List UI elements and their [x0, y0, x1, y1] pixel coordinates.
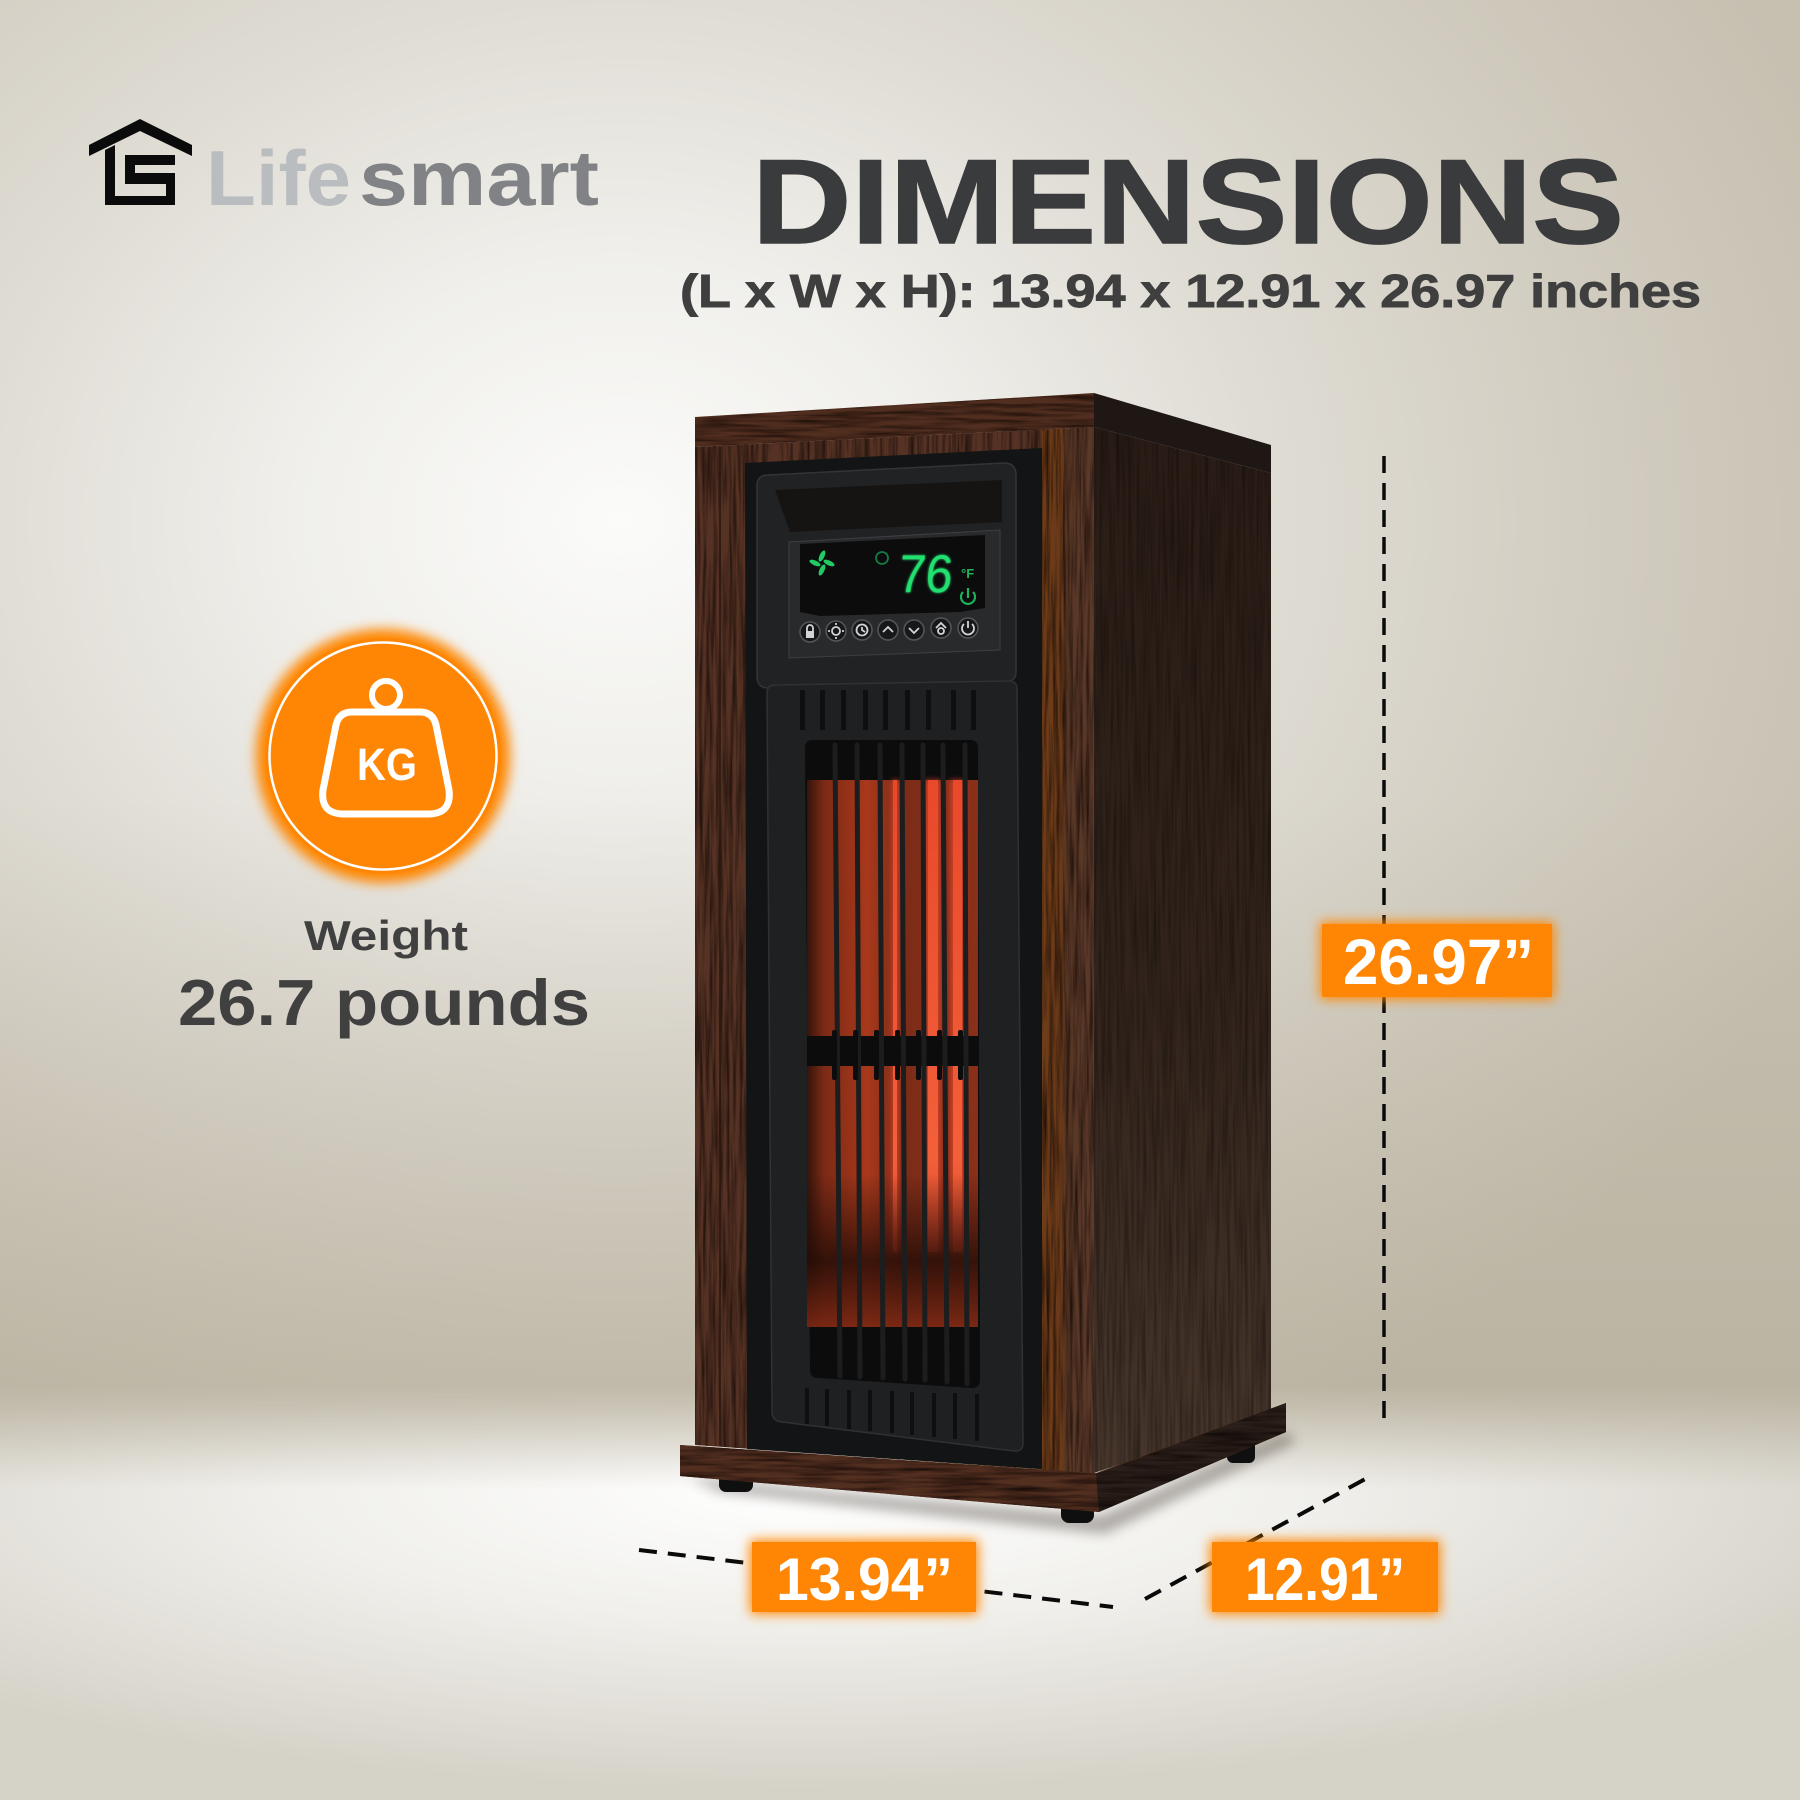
lower grille panel [767, 681, 1023, 1451]
icon: timer [876, 552, 888, 564]
right wood strip [1042, 427, 1094, 1473]
top cap right band [1094, 393, 1271, 473]
grille bars [835, 745, 967, 1384]
front frame [695, 427, 1094, 1473]
support band hooks [832, 1030, 963, 1080]
logo wordmark: smart: smart [359, 134, 599, 222]
feet [719, 1440, 1255, 1523]
depth dashed line [1145, 1477, 1369, 1599]
lower heat fade [807, 780, 978, 1327]
icon: weight badge [256, 629, 510, 883]
product: tower heater [680, 393, 1286, 1523]
width dashed line [639, 1550, 1113, 1607]
control buttons [800, 618, 978, 642]
black front panel [745, 448, 1042, 1469]
title: DIMENSIONS [752, 135, 1624, 269]
display glass [800, 535, 985, 616]
weight label: Weight [304, 912, 468, 959]
control module [757, 463, 1016, 688]
icon: house logo [89, 119, 192, 205]
floor shadow [690, 1432, 1296, 1534]
icon text: KG: KG [357, 739, 417, 790]
base [680, 1403, 1286, 1512]
icon: power led [961, 588, 975, 604]
glowing tubes [893, 780, 962, 1252]
label: height [1320, 922, 1554, 999]
top cap front band [695, 393, 1094, 447]
heater glow [807, 780, 978, 1327]
heating window [805, 740, 980, 1388]
control plate [789, 530, 1000, 658]
recessed top [775, 480, 1002, 532]
logo wordmark: Life: Life [206, 134, 351, 222]
icon: fan [809, 550, 835, 576]
top vents [800, 690, 976, 730]
weight panel [178, 629, 590, 1039]
label: width [750, 1540, 978, 1614]
display unit: °F [961, 566, 974, 581]
display readout: temperature: 76 [896, 544, 955, 604]
brand logo [89, 119, 599, 222]
glowing tube: soft halos [892, 780, 965, 1252]
background floor [0, 1380, 1800, 1800]
height dashed line [1382, 456, 1386, 1418]
button icons [806, 621, 974, 639]
grille frame [767, 681, 1023, 1451]
background wall shading [0, 800, 1800, 1490]
depth value: 12.91” [1245, 1546, 1405, 1613]
subtitle: overall dimensions: (L x W x H): 13.94 x 12.91 x 26.97 inches [680, 265, 1701, 317]
horizontal support band [807, 1036, 978, 1066]
side panel [1094, 427, 1271, 1473]
bottom vents [805, 1388, 979, 1441]
weight value: 26.7 pounds [178, 966, 590, 1039]
label: depth [1210, 1540, 1440, 1614]
height value: 26.97” [1343, 926, 1534, 998]
width value: 13.94” [776, 1546, 953, 1613]
